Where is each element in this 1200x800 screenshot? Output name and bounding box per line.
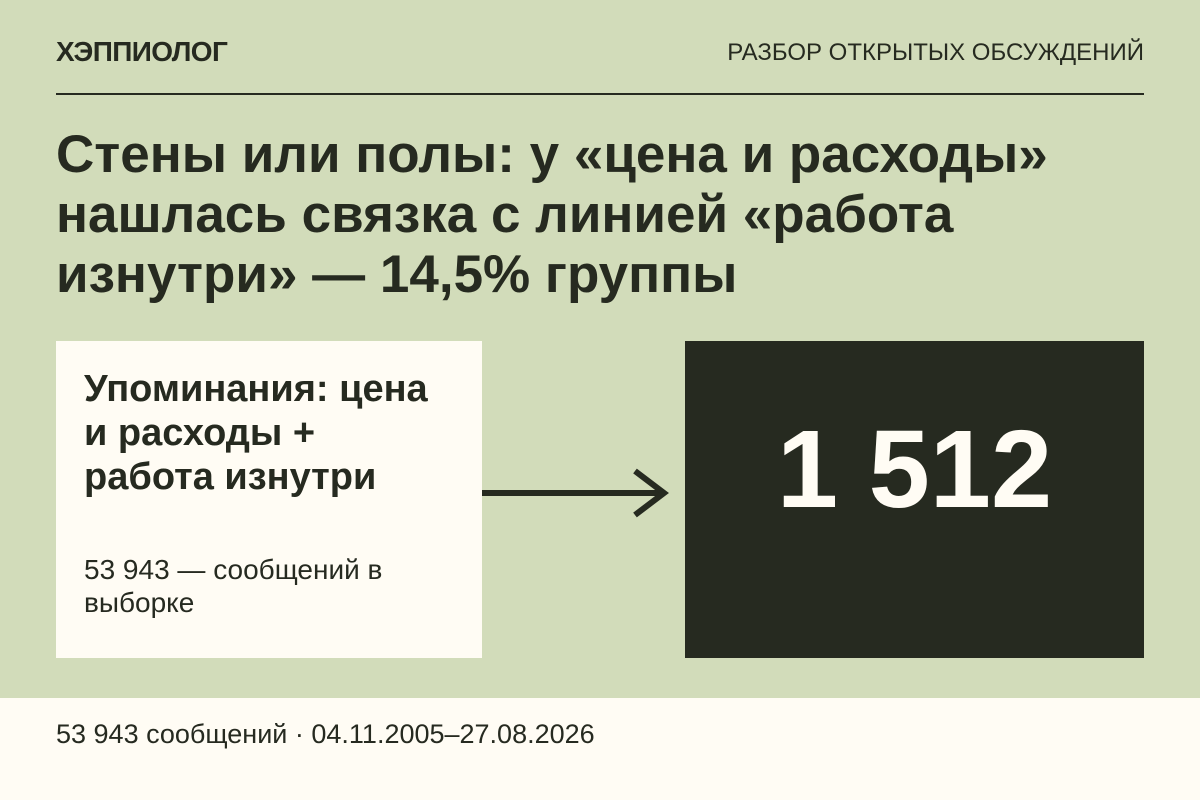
- panel heading: Упоминания: цена: [84, 368, 428, 410]
- panel: result number: [685, 341, 1144, 658]
- panel heading: [84, 368, 428, 498]
- panel note: 53 943 — сообщений в: [84, 554, 382, 585]
- panel: mentions: [56, 341, 482, 658]
- header caption: РАЗБОР ОТКРЫТЫХ ОБСУЖДЕНИЙ: [727, 39, 1144, 66]
- brand name: ХЭППИОЛОГ: [56, 36, 227, 67]
- footer: [0, 698, 1200, 800]
- big number: 1 512: [777, 408, 1052, 531]
- title: [56, 125, 1048, 304]
- title: нашлась связка с линией «работа: [56, 185, 953, 244]
- panel heading: работа изнутри: [84, 456, 376, 498]
- panel note: выборке: [84, 587, 194, 618]
- panel note: [84, 554, 382, 618]
- title: изнутри» — 14,5% группы: [56, 245, 737, 304]
- arrow: [482, 468, 669, 518]
- panel heading: и расходы +: [84, 412, 315, 454]
- title: Стены или полы: у «цена и расходы»: [56, 125, 1048, 184]
- footer text: 53 943 сообщений · 04.11.2005–27.08.2026: [56, 719, 595, 749]
